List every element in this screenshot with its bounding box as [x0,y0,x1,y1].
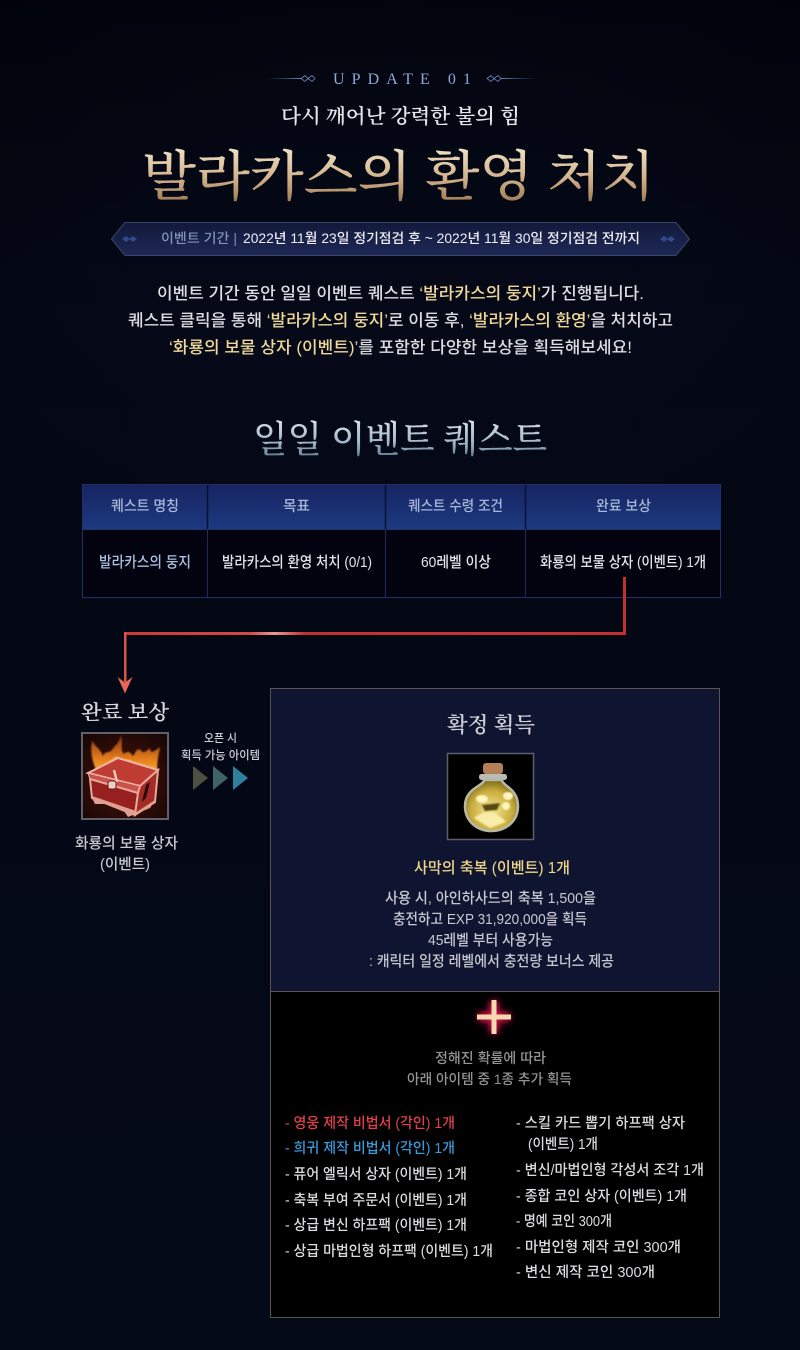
item list right: - 마법인형 제작 코인 300개 [516,1239,681,1256]
item list right: - 스킬 카드 뽑기 하프팩 상자 [516,1115,685,1132]
table body: 발라카스의 환영 처치 (0/1) [222,554,372,571]
panel heading: 확정 획득 [447,713,535,737]
intro paragraph: 퀘스트 클릭을 통해 ‘발라카스의 둥지’로 이동 후, ‘발라카스의 환영’을 처치하고 [128,311,673,330]
banner label: 이벤트 기간 | [161,231,237,246]
table header: 퀘스트 수령 조건 [408,498,503,515]
arrow: reward link [118,577,626,694]
table body: 60레벨 이상 [421,554,491,571]
item description: 45레벨 부터 사용가능 [428,932,553,949]
header label: UPDATE 01: UPDATE 01 [333,71,471,88]
banner dates: 2022년 11월 23일 정기점검 후 ~ 2022년 11월 30일 정기점검 전까지 [243,230,640,246]
table body: 발라카스의 둥지 [99,554,191,571]
chance note: 정해진 확률에 따라 [435,1050,546,1066]
item list right: - 변신 제작 코인 300개 [516,1264,655,1281]
subtitle: 다시 깨어난 강력한 불의 힘 [281,104,520,128]
item description: : 캐릭터 일정 레벨에서 충전량 보너스 제공 [369,953,614,970]
hint text [181,732,260,762]
item description: 사용 시, 아인하사드의 축복 1,500을 [385,890,596,907]
hint text: 획득 가능 아이템 [181,749,260,762]
event period banner [112,222,690,256]
reward name: (이벤트) [100,856,150,873]
item list right: - 종합 코인 상자 (이벤트) 1개 [516,1188,687,1205]
item list right: (이벤트) 1개 [528,1136,598,1153]
open hint with arrows [181,732,260,790]
item list right: - 명예 코인 300개 [516,1213,612,1230]
icon: treasure chest [82,733,168,819]
triple arrows [193,766,248,790]
section heading: 일일 이벤트 퀘스트 [253,419,547,461]
table body: 화룡의 보물 상자 (이벤트) 1개 [540,554,706,571]
icon: potion [448,754,534,840]
table header: 퀘스트 명칭 [111,498,179,515]
reward name: 화룡의 보물 상자 [75,835,178,852]
item list left: - 퓨어 엘릭서 상자 (이벤트) 1개 [285,1166,467,1183]
table header [83,485,720,529]
item name: 사막의 축복 (이벤트) 1개 [414,859,570,877]
reward name [75,835,178,873]
reward heading: 완료 보상 [81,701,170,724]
item list right: - 변신/마법인형 각성서 조각 1개 [516,1162,704,1179]
header label: UPDATE 01 [265,71,537,88]
hint text: 오픈 시 [204,732,237,745]
banner ornament right [660,236,675,242]
item description: 충전하고 EXP 31,920,000을 획득 [393,911,587,928]
item list left: - 상급 변신 하프팩 (이벤트) 1개 [285,1217,467,1234]
icon: plus [477,1000,511,1034]
item list right [516,1115,704,1281]
intro paragraph [128,284,673,357]
guaranteed reward panel [270,688,720,992]
item list left: - 상급 마법인형 하프팩 (이벤트) 1개 [285,1243,493,1260]
table header: 완료 보상 [596,498,651,515]
item list left: - 희귀 제작 비법서 (각인) 1개 [285,1140,455,1157]
table header: 목표 [283,499,310,515]
item list left [285,1115,493,1260]
chance note [407,1050,572,1087]
additional reward panel [270,992,720,1318]
banner ornament left [122,236,137,242]
table body [99,554,706,571]
intro paragraph: ‘화룡의 보물 상자 (이벤트)’ 를 포함한 다양한 보상을 획득해보세요! [169,338,632,357]
item list left: - 영웅 제작 비법서 (각인) 1개 [285,1115,455,1132]
item list left: - 축복 부여 주문서 (이벤트) 1개 [285,1192,467,1209]
intro paragraph: 이벤트 기간 동안 일일 이벤트 퀘스트 ‘발라카스의 둥지’가 진행됩니다. [157,284,644,303]
item description [369,890,614,970]
quest table [82,484,720,598]
reward column [75,701,178,873]
title: 발라카스의 환영 처치 [142,147,655,207]
chance note: 아래 아이템 중 1종 추가 획득 [407,1071,572,1087]
